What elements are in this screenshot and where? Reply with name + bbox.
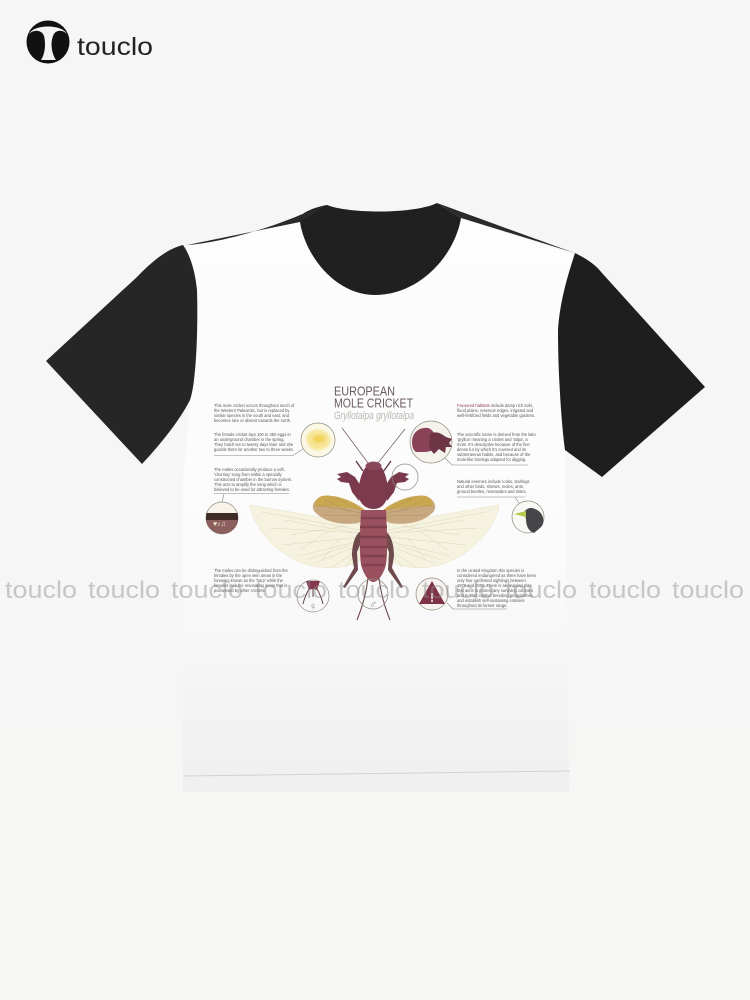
right sleeve bbox=[558, 253, 705, 477]
text block: conservation: that aims to protect any surviving colonies bbox=[457, 588, 533, 593]
watermark row: touclo bbox=[88, 577, 160, 604]
text block: name: The scientific name is derived from the latin bbox=[457, 432, 536, 437]
right shoulder strip bbox=[437, 203, 575, 253]
right hind wing bbox=[388, 505, 499, 568]
inset: male bbox=[358, 579, 388, 611]
inset: conservation warning bbox=[416, 578, 448, 610]
text block: eggs: The female cricket lays 100 to 350 eggs in bbox=[214, 432, 291, 437]
connector: eggs bbox=[214, 449, 303, 456]
text block: range bbox=[214, 403, 295, 423]
title: MOLE CRICKET bbox=[334, 396, 413, 410]
shirt body bbox=[183, 218, 575, 792]
hem stitching bbox=[184, 771, 570, 776]
cerci bbox=[357, 578, 390, 620]
text block: sexes: forewing known as the 'harp' while the bbox=[214, 578, 284, 583]
text block: sexes bbox=[214, 568, 288, 593]
text block: sexes: females lack the resonating areas that is bbox=[214, 583, 287, 588]
text block: name: 'gryllus' meaning a cricket and 'talpa', a bbox=[457, 437, 528, 442]
text block: eggs: an underground chamber in the spring. bbox=[214, 437, 285, 442]
watermark row: touclo bbox=[672, 577, 744, 604]
text block: habitats: flood plains, reservoir edges, irrigated and bbox=[457, 408, 534, 413]
watermark row: touclo bbox=[338, 577, 410, 604]
connector: song bbox=[214, 494, 289, 502]
text block: habitats bbox=[457, 403, 535, 418]
text block: name: dense fur by which it's covered and its bbox=[457, 447, 526, 452]
text block: conservation: and to start captive breeding programmes bbox=[457, 593, 533, 598]
logo bbox=[26, 20, 153, 64]
connector: conservation bbox=[447, 603, 507, 609]
left foreleg bbox=[337, 472, 362, 501]
text block: range: the Western Palearctic, but is replaced by bbox=[214, 408, 290, 413]
inset: burrow: ♥♪♫ bbox=[213, 521, 226, 528]
text block: song: believed to be used for attracting females. bbox=[214, 487, 290, 492]
text block: sexes: possessed by other crickets. bbox=[214, 588, 266, 593]
text block: conservation: and establish self-sustaining colonies bbox=[457, 598, 525, 603]
text block: song: 'churring' song from within a specially bbox=[214, 472, 282, 477]
antennae bbox=[342, 428, 405, 463]
text block: habitats: well-fertilized fields and vegetable gardens. bbox=[457, 413, 535, 418]
inset: foreleg bbox=[410, 421, 452, 463]
title: EUROPEAN bbox=[334, 384, 395, 398]
text block: name bbox=[457, 432, 536, 462]
watermark row: touclo bbox=[505, 577, 577, 604]
inset: burrow bbox=[206, 502, 238, 534]
t-shirt bbox=[46, 203, 705, 792]
pronotum bbox=[358, 465, 388, 509]
inset: male: ♂ bbox=[369, 599, 377, 611]
connector: enemies bbox=[457, 497, 525, 503]
text block: sexes: females by the open vein areas in the bbox=[214, 573, 283, 578]
left hind wing bbox=[250, 505, 360, 568]
watermark row: touclo bbox=[171, 577, 243, 604]
text block: range: becomes rare or absent towards the north. bbox=[214, 418, 291, 423]
text block: song bbox=[214, 467, 292, 492]
head bbox=[366, 462, 382, 470]
back collar bbox=[299, 203, 461, 295]
right hind leg bbox=[384, 531, 403, 588]
title: Gryllotalpa gryllotalpa bbox=[334, 410, 414, 422]
inset: leg outline bbox=[392, 464, 418, 490]
right foreleg bbox=[384, 472, 409, 501]
text block: range: This mole cricket occurs throughout much of bbox=[214, 403, 295, 408]
text block: conservation: throughout its former range. bbox=[457, 603, 508, 608]
connector: name bbox=[445, 458, 528, 465]
text block: conservation bbox=[457, 568, 537, 608]
inset: female bbox=[297, 580, 329, 613]
inset: conservation warning: ! bbox=[430, 590, 434, 605]
inset: female: ♀ bbox=[309, 601, 317, 613]
right tegmen bbox=[382, 496, 435, 524]
text block: song: The males occasionally produce a soft, bbox=[214, 467, 285, 472]
watermark row: touclo bbox=[255, 577, 327, 604]
text block: enemies bbox=[457, 479, 530, 494]
text block: song: This acts to amplify the song which is bbox=[214, 482, 282, 487]
text block: eggs bbox=[214, 432, 294, 452]
watermark row: touclo bbox=[5, 577, 77, 604]
inset: eggs bbox=[301, 423, 335, 457]
text block: name: mole. It's descriptive because of the fine bbox=[457, 442, 530, 447]
text block: conservation: 1970 and 2005. There is an ongoing plan bbox=[457, 583, 532, 588]
left hind leg bbox=[343, 531, 362, 588]
text block: eggs: They hatch ten to twenty days later and she bbox=[214, 442, 294, 447]
icon: logo badge bbox=[26, 20, 70, 64]
left tegmen bbox=[313, 496, 366, 524]
inset: bird bbox=[512, 501, 544, 533]
text block: enemies: and other birds, shrews, moles, ants, bbox=[457, 484, 524, 489]
left shoulder strip bbox=[187, 205, 327, 245]
mole cricket illustration bbox=[250, 428, 499, 620]
abdomen bbox=[360, 510, 387, 582]
left sleeve bbox=[46, 245, 197, 464]
text block: name: subterranean habits, and because of the bbox=[457, 452, 531, 457]
watermark row: touclo bbox=[589, 577, 661, 604]
text block: song: constructed chamber in the burrow system. bbox=[214, 477, 292, 482]
text block: enemies: Natural enemies include rooks, starlings bbox=[457, 479, 530, 484]
palps bbox=[356, 461, 391, 472]
title bbox=[334, 384, 414, 422]
text block: name: mole-like forelegs adapted for digging. bbox=[457, 457, 526, 462]
logo wordmark: touclo bbox=[77, 33, 153, 61]
text block: conservation: considered endangered as there have been bbox=[457, 573, 537, 578]
watermark row bbox=[5, 577, 744, 604]
text block: habitats: Favoured habitats include damp rich soils, bbox=[457, 403, 533, 408]
text block: conservation: only four confirmed sightings between bbox=[457, 578, 526, 583]
text block: sexes: The males can be distinguished from the bbox=[214, 568, 288, 573]
text block: conservation: In the United Kingdom this species is bbox=[457, 568, 524, 573]
text block: eggs: guards them for another two to three weeks. bbox=[214, 447, 294, 452]
text block: enemies: ground beetles, nematodes and mites. bbox=[457, 489, 527, 494]
watermark row: touclo bbox=[422, 577, 494, 604]
text block: range: similar species in the south and east, and bbox=[214, 413, 290, 418]
